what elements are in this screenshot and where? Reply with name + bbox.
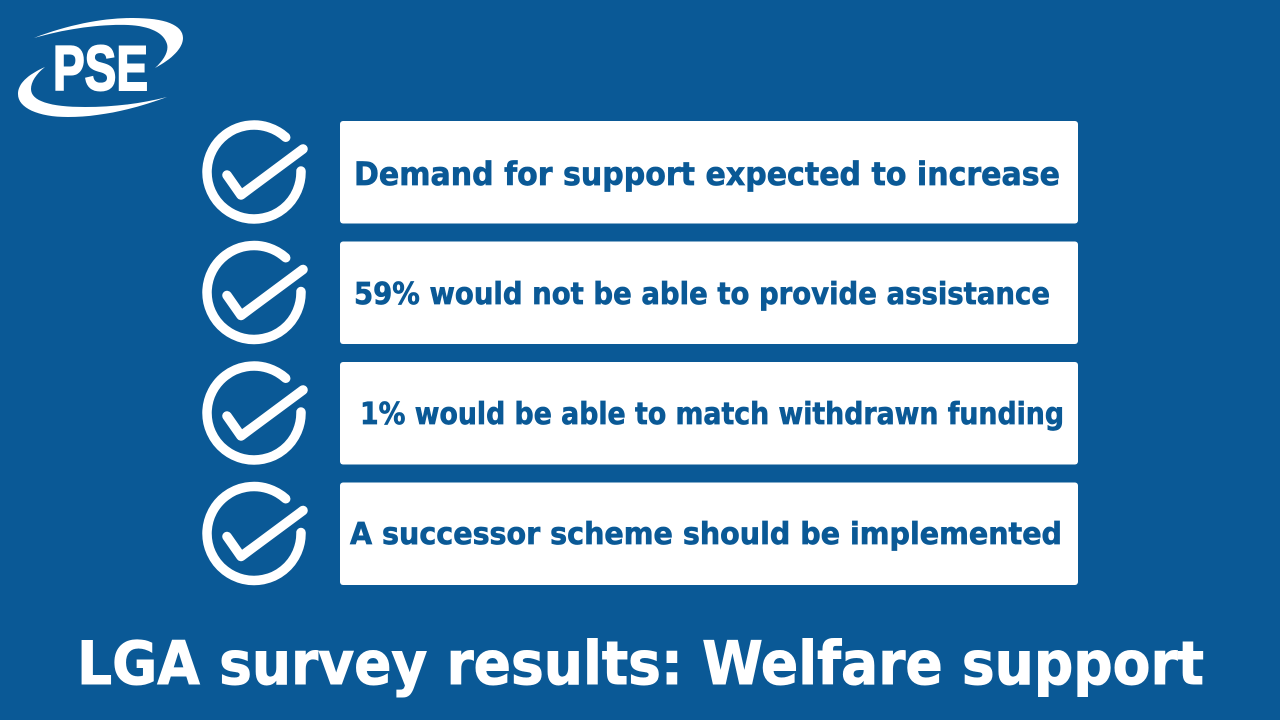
row 3 panel: 1% would be able to match withdrawn funding (360, 397, 1064, 432)
icon: check 1 (207, 125, 303, 219)
row 1 panel: Demand for support expected to increase (354, 155, 1060, 193)
logo: PSE: PSE (53, 34, 148, 104)
icon: check 4 (207, 487, 303, 581)
row 4 panel (340, 482, 1078, 585)
row 2 panel: 59% would not be able to provide assistance (354, 277, 1050, 312)
row 3 panel (340, 362, 1078, 464)
row 4 panel: A successor scheme should be implemented (350, 517, 1062, 552)
title: LGA survey results: Welfare support (77, 629, 1204, 699)
row 2 panel (340, 242, 1078, 344)
icon: check 2 (207, 246, 303, 340)
logo: PSE (18, 18, 183, 117)
icon: check 3 (207, 366, 303, 460)
row 1 panel (340, 121, 1078, 224)
